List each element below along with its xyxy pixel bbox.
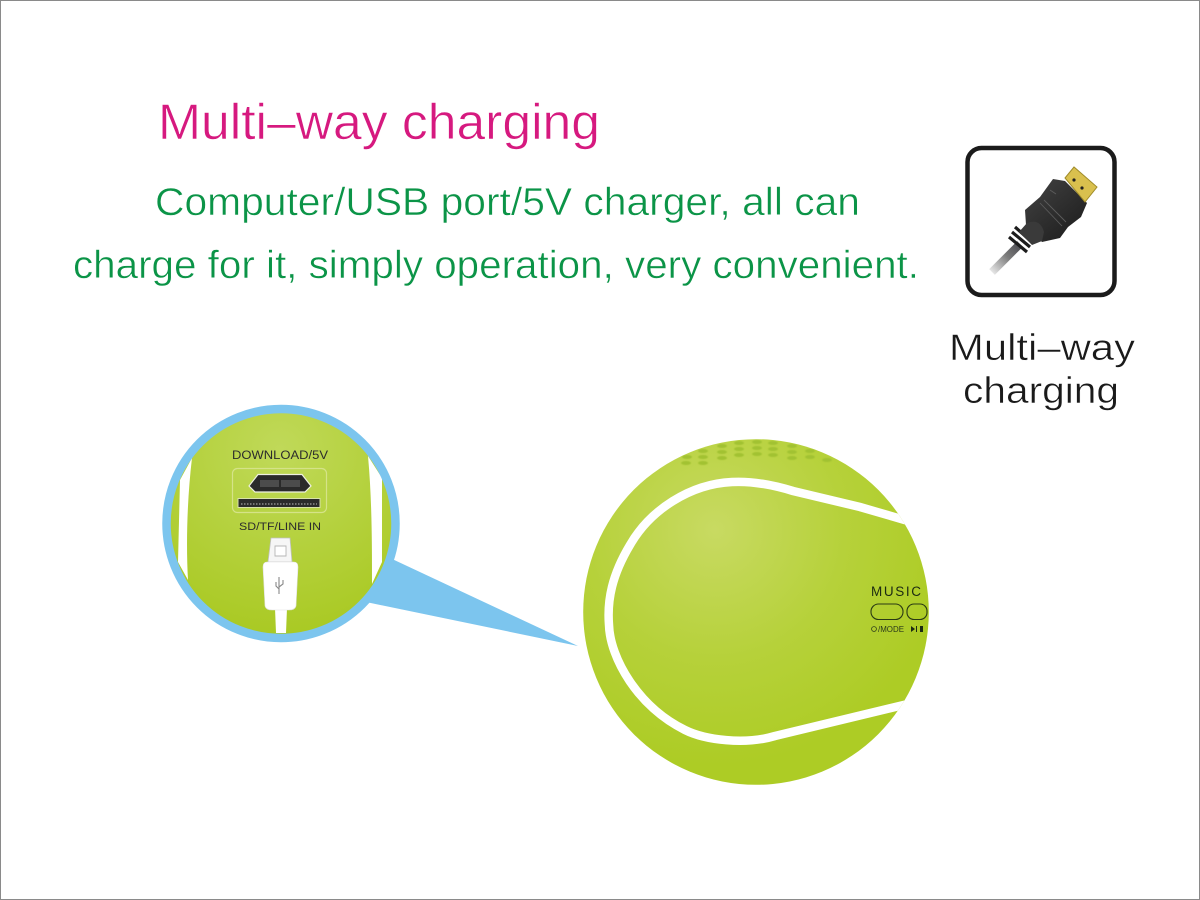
slot label: SD/TF/LINE IN	[239, 521, 321, 533]
title: Multi–way charging	[158, 94, 600, 150]
description text: Computer/USB port/5V charger, all can	[155, 181, 860, 224]
control buttons	[871, 604, 927, 620]
music label: MUSIC	[871, 584, 921, 599]
callout pointer	[366, 558, 578, 646]
tennis ball speaker	[583, 439, 929, 785]
card slot	[238, 498, 320, 508]
usb plug	[263, 538, 298, 633]
icon caption: Multi–way	[949, 327, 1136, 368]
lens ring	[166, 409, 396, 638]
download label: DOWNLOAD/5V	[232, 450, 328, 462]
icon caption: charging	[963, 370, 1119, 411]
play pause label	[911, 626, 923, 632]
mode label: /MODE	[878, 625, 904, 634]
icon: charging cable	[968, 148, 1114, 295]
speaker grille	[681, 440, 832, 465]
icon caption	[949, 327, 1136, 411]
description text	[73, 181, 919, 287]
micro usb port	[249, 474, 311, 492]
magnified callout lens	[166, 409, 396, 638]
lens seams	[178, 456, 382, 584]
ball seam	[609, 482, 915, 741]
description text: charge for it, simply operation, very convenient.	[73, 244, 919, 287]
port panel	[232, 468, 326, 512]
